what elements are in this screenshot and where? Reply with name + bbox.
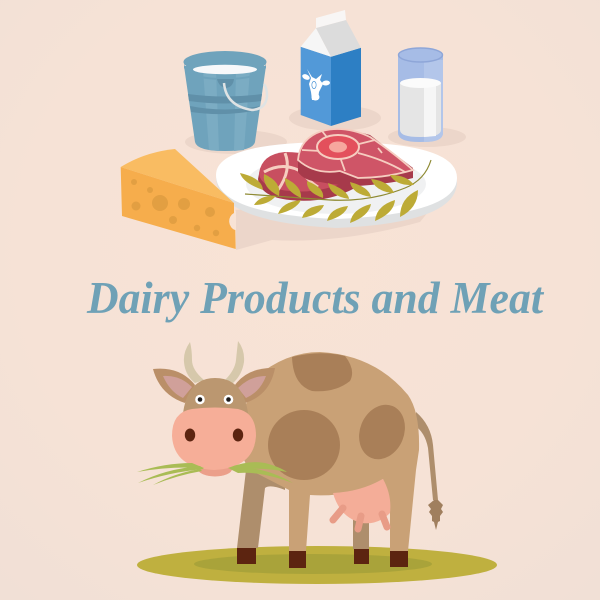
plate with steaks and herb: [216, 129, 457, 241]
eyes: [195, 395, 233, 404]
body: [241, 352, 419, 551]
nostrils: [185, 428, 195, 442]
title: Dairy Products and Meat: [86, 273, 544, 323]
ground: [137, 546, 497, 584]
grass in mouth: [137, 462, 293, 485]
icon: cheese wedge: [121, 149, 272, 250]
hooves: [289, 551, 408, 568]
plate shadow: [235, 195, 442, 241]
front steak: [298, 129, 413, 186]
tail: [414, 412, 443, 530]
illustration: cow: [137, 341, 443, 568]
horns: [184, 342, 204, 383]
lower lip: [198, 462, 232, 476]
head top: [180, 378, 250, 430]
head: [153, 341, 275, 476]
icon: cow logo on carton: [301, 69, 330, 100]
icon: herb sprig: [240, 160, 431, 223]
udder: [333, 479, 390, 529]
far legs: [237, 470, 369, 564]
icon: milk carton: [289, 10, 381, 131]
icon: glass of milk: [388, 48, 466, 147]
back steak: [258, 152, 355, 201]
ears: [153, 369, 195, 403]
muzzle: [172, 408, 256, 470]
icon: milk bucket: [184, 51, 287, 154]
body spots: [268, 353, 413, 480]
